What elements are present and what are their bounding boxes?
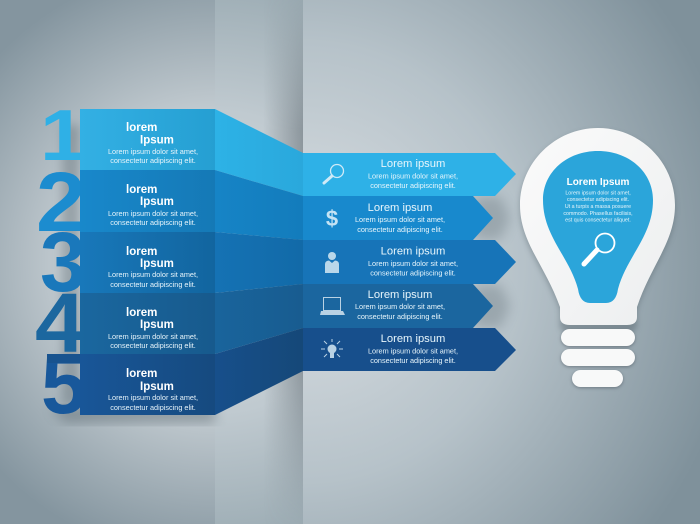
light bulb <box>520 128 675 387</box>
digit 5: 5 <box>41 337 87 431</box>
band 5 <box>80 328 303 415</box>
bulb body text: est quis consectetur aliquet. <box>565 218 631 224</box>
band 3 <box>80 232 303 293</box>
band 2: Ipsum <box>140 196 174 208</box>
bulb ring 2 <box>561 349 635 366</box>
band 4: Lorem ipsum dolor sit amet, <box>108 332 198 341</box>
icon: bulb magnifier <box>584 234 614 264</box>
arrow 1: consectetur adipiscing elit. <box>370 181 456 190</box>
band 5: Ipsum <box>140 381 174 393</box>
arrow 4: Lorem ipsum dolor sit amet, <box>355 302 445 311</box>
icon: dollar: $ <box>326 206 338 231</box>
band 1: Lorem ipsum dolor sit amet, <box>108 147 198 156</box>
arrow 4: consectetur adipiscing elit. <box>357 312 443 321</box>
band 3: consectetur adipiscing elit. <box>110 280 196 289</box>
icon: magnifier <box>324 164 344 183</box>
bulb ring 1 <box>561 329 635 346</box>
shadow below left ribbon <box>50 408 215 422</box>
band 3: lorem <box>126 246 157 258</box>
digit 3: 3 <box>40 215 86 309</box>
band 5: consectetur adipiscing elit. <box>110 403 196 412</box>
digit 1: 1 <box>40 96 86 176</box>
arrow 1 <box>303 153 516 196</box>
arrow 2: consectetur adipiscing elit. <box>357 225 443 234</box>
arrow 3: Lorem ipsum dolor sit amet, <box>368 259 458 268</box>
bulb inner <box>543 151 653 303</box>
band 2: Lorem ipsum dolor sit amet, <box>108 209 198 218</box>
digit 2: 2 <box>36 155 86 249</box>
arrow 2 <box>303 196 493 240</box>
shadow behind digits <box>62 125 80 405</box>
icon: laptop <box>320 298 345 315</box>
band 2: lorem <box>126 184 157 196</box>
bulb body text: consectetur adipiscing elit. <box>567 197 629 203</box>
arrow 2: Lorem ipsum <box>368 202 432 214</box>
arrow 1: Lorem ipsum <box>381 158 445 170</box>
panel: right arrows <box>303 153 516 371</box>
top tab of band 5 <box>47 354 80 363</box>
band 2: consectetur adipiscing elit. <box>110 218 196 227</box>
band 4: Ipsum <box>140 319 174 331</box>
shadow of bulb <box>520 131 675 332</box>
bulb body text: Lorem ipsum dolor sit amet, <box>565 190 631 196</box>
bulb body text: commodo. Phasellus facilisis, <box>563 211 633 217</box>
band 3: Lorem ipsum dolor sit amet, <box>108 270 198 279</box>
band 1 <box>80 109 303 196</box>
bulb ring 3 <box>572 370 623 387</box>
bulb body text: Ut a turpis a massa posuere <box>565 204 631 210</box>
band 4 <box>80 284 303 354</box>
band 1: lorem <box>126 122 157 134</box>
band 1: consectetur adipiscing elit. <box>110 156 196 165</box>
panel: numbered digits <box>36 110 80 414</box>
arrow shadows <box>473 196 510 328</box>
band 5: Lorem ipsum dolor sit amet, <box>108 393 198 402</box>
icon: light bulb <box>321 339 343 358</box>
band 4: consectetur adipiscing elit. <box>110 341 196 350</box>
arrow 5: consectetur adipiscing elit. <box>370 356 456 365</box>
band 3: Ipsum <box>140 258 174 270</box>
bulb title: Lorem Ipsum <box>567 177 629 188</box>
panel: left bands <box>80 109 303 415</box>
icon: person <box>325 252 339 273</box>
arrow 5: Lorem ipsum dolor sit amet, <box>368 346 458 356</box>
band 1: Ipsum <box>140 134 174 146</box>
digit 4: 4 <box>35 276 85 370</box>
arrow 3 <box>303 240 516 284</box>
arrow 3: Lorem ipsum <box>381 246 445 258</box>
arrow 3: consectetur adipiscing elit. <box>370 268 456 278</box>
bulb body text <box>563 190 633 224</box>
arrow 5 <box>303 328 516 371</box>
arrow 5: Lorem ipsum <box>381 333 445 345</box>
band 5: lorem <box>126 368 157 380</box>
arrow 4: Lorem ipsum <box>368 289 432 301</box>
bulb outer <box>520 128 675 325</box>
arrow 2: Lorem ipsum dolor sit amet, <box>355 215 445 224</box>
arrow 4 <box>303 284 493 328</box>
band 4: lorem <box>126 307 157 319</box>
arrow 1: Lorem ipsum dolor sit amet, <box>368 172 458 180</box>
band 2 <box>80 170 303 240</box>
